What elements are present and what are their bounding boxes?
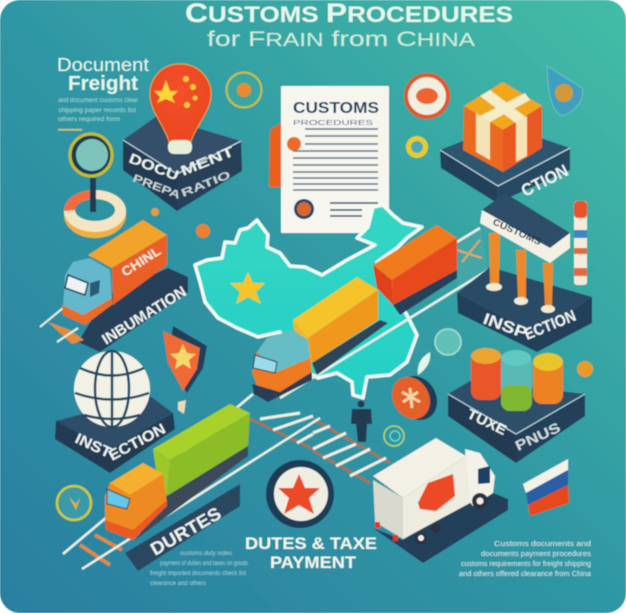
fine print: lower left: clearance and others [150,581,206,587]
figure: customs officer [351,400,372,442]
label: taxes and payments: TUXE [465,405,509,438]
label: taxes and payments [465,405,563,454]
heading: duties and taxes payment: PAYMENT [270,553,357,572]
platform: truck base [373,490,508,563]
truck: China container: CHINL [118,243,164,280]
icon: Russian flag [523,459,569,516]
label: document preparation [127,143,237,202]
side heading: document freight: Document [57,55,149,75]
document: customs form [269,86,389,233]
rails: left track [40,308,84,344]
icon: shield [547,66,583,116]
train: green container [105,404,250,540]
truck: China container [62,220,167,325]
platform: customs gate [457,193,592,352]
title: for F RAIN from C HINA [207,28,475,51]
fine print: lower right: documents payment procedures [481,551,592,558]
fine print: lower left [150,551,248,587]
icon: parcel [463,82,542,172]
fine print: lower right [459,541,592,578]
icon: small orange dots [151,208,210,238]
track: upper railway [280,228,488,398]
label: document preparation: DOCU [127,150,181,183]
title [185,0,513,51]
striped pole [574,201,587,285]
side heading: document freight: shipping paper records list [58,108,136,114]
platform: information with truck [40,220,190,352]
platform: globe inspection: ECTION [106,420,169,465]
document: customs form: CUSTOMS [293,100,379,117]
fine print: lower left: payment of duties and taxes on goods [160,561,248,567]
fine print: lower left: freight imported documents check list [150,571,246,577]
icon: swirl [384,426,404,446]
platform: globe inspection [55,351,175,473]
fine print: lower right: customs requirements for freight shipping [461,561,591,568]
gate pillars [489,233,553,309]
icon: yellow ring lower left [57,486,91,520]
side heading: document freight: and document customs clear [58,98,138,104]
document: customs form: PROCEDURES [293,120,374,127]
gate roof [480,193,570,263]
icon: orange coin [384,369,445,427]
label: information: INBUMATION [99,283,190,348]
icon: barrels [471,348,563,411]
label: document preparation: PREPA [131,173,182,202]
icon: map star [230,272,265,304]
icon: globe [74,351,150,427]
fine print: lower right: and others offered clearance from China [459,571,591,578]
icon: orange map badge [406,75,448,117]
label: inspection: INSP [481,311,530,343]
map of China [195,205,422,398]
icon: orange dot [577,361,593,377]
label: document preparation: MENT [178,143,237,179]
track: lower railway [63,394,390,569]
icon: magnifier on ring [64,134,126,238]
container: yellow and locomotive [252,277,388,402]
fine print: lower left: customs duty notes [180,551,232,557]
label: inspection [481,308,579,344]
label: taxes and payments: PNUS [513,419,563,454]
heading: duties and taxes payment: DUTES & TAXE [245,534,377,553]
label platform: duties: DURTES [147,503,225,559]
platform: inspection box [440,82,571,203]
icon: China flag map pin [150,64,211,154]
icon: target circle [226,72,262,108]
icon: bubble and leaf [418,329,461,375]
side heading: document freight: others required form [58,117,120,123]
platform: taxes with barrels [448,348,585,463]
platform: document preparation [123,116,242,211]
side heading: document freight [57,55,149,130]
container: red orange [373,225,457,315]
icon: shield with star [163,326,207,414]
label platform: duties [125,484,240,571]
label: inspection box: CTION [518,161,571,201]
heading: duties and taxes payment [245,534,377,572]
truck: white delivery [373,438,495,544]
label: inspection: ECTION [522,308,579,344]
side heading: document freight: Freight [68,73,138,95]
gate roof: CUSTOMS [491,217,543,247]
icon: yellow badge [406,136,428,158]
label: inspection globe: INST [72,430,114,462]
icon: star dial [266,460,334,528]
fine print: lower right: Customs documents and [494,541,591,548]
label: document preparation: RATIO [180,169,233,200]
